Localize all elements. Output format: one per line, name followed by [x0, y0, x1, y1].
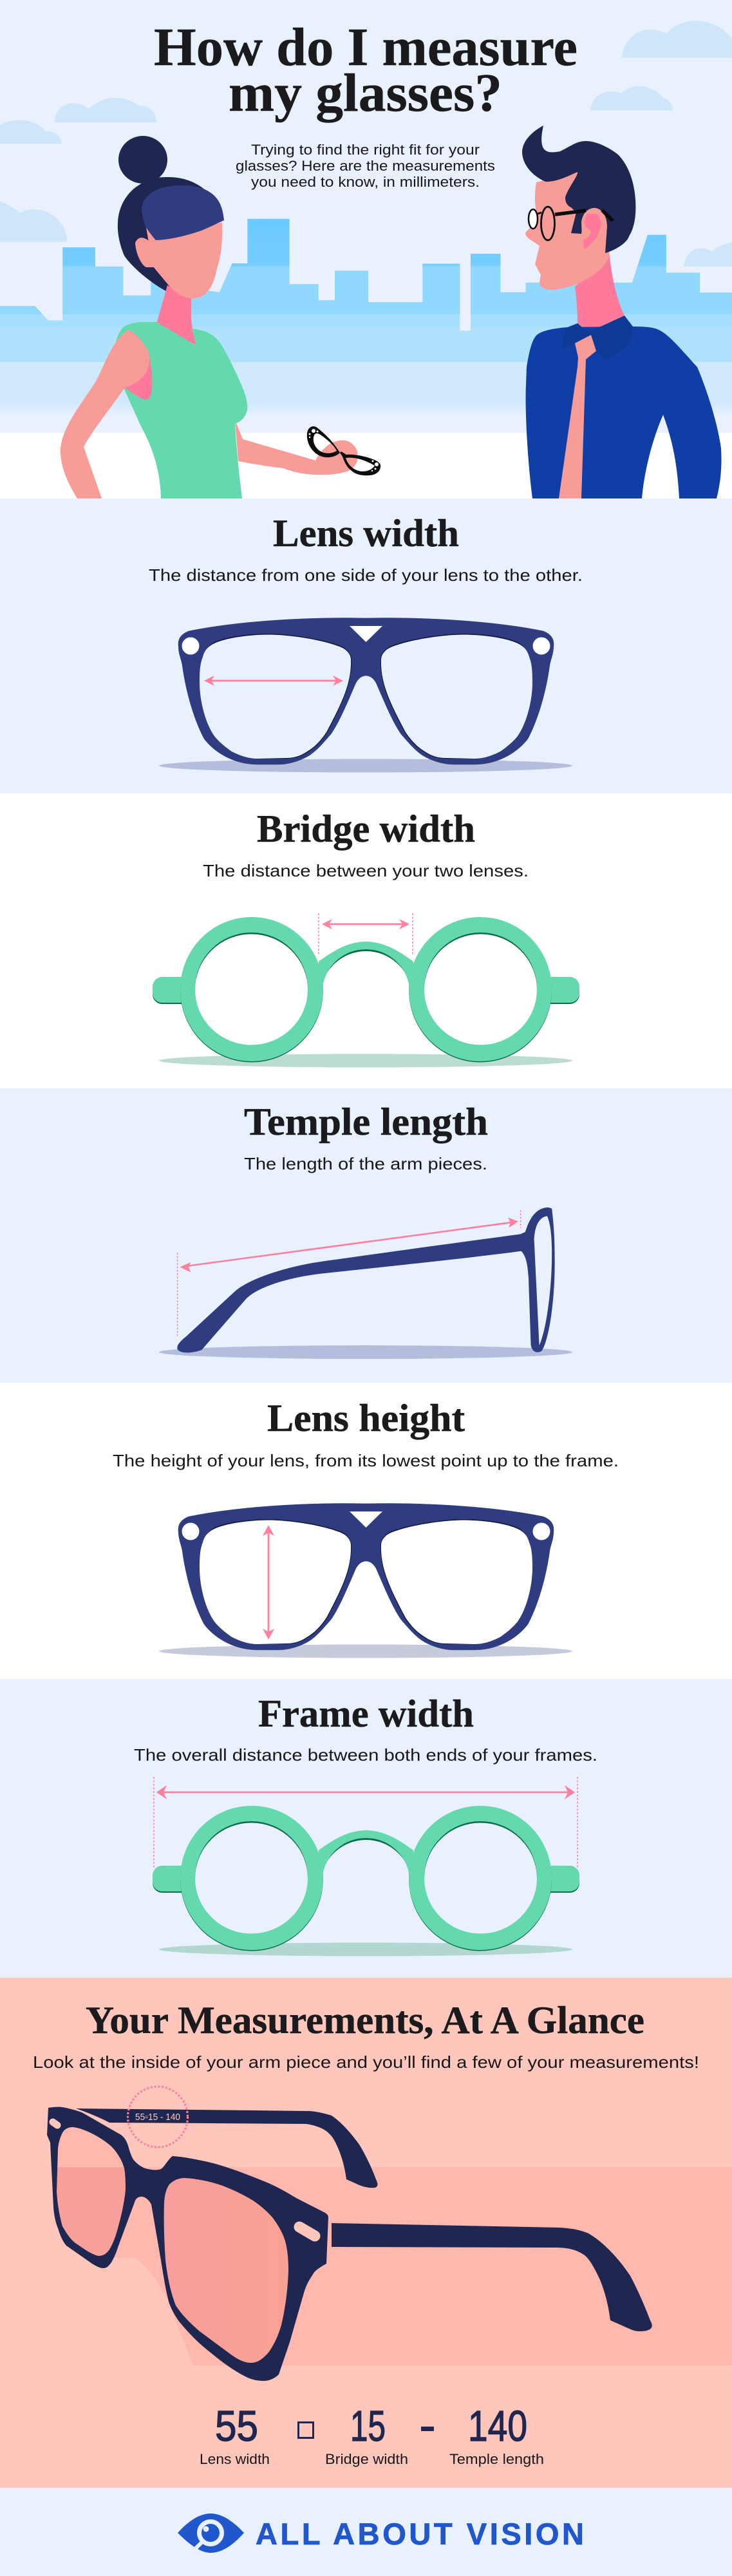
panel: bridge width — [0, 793, 732, 1088]
description: bridge width: The distance between your two lenses. — [203, 861, 529, 880]
skyline — [0, 219, 732, 417]
main title: How do I measure — [154, 17, 577, 77]
icon: man's glasses — [529, 207, 613, 240]
measurement labels: Bridge width — [325, 2451, 408, 2467]
panel: lens width — [0, 498, 732, 793]
heading: bridge width: Bridge width — [257, 808, 475, 850]
arrow: bridge width — [319, 913, 413, 955]
callout: arm piece numbers: 55▫15 - 140 — [135, 2112, 180, 2123]
woman — [61, 136, 357, 498]
heading: lens height: Lens height — [267, 1397, 465, 1439]
callout: arm piece numbers — [127, 2087, 188, 2147]
arrow: lens height — [263, 1525, 274, 1640]
icon: cat eye glasses in hand — [307, 426, 380, 475]
arrow: frame width — [154, 1777, 577, 1868]
logo wordmark: ALL ABOUT VISION — [256, 2517, 584, 2551]
arrow: temple length — [178, 1210, 521, 1336]
description: measurements: Look at the inside of your arm piece and you’ll find a few of your measurements! — [33, 2052, 699, 2072]
description: frame width: The overall distance between both ends of your frames. — [134, 1745, 597, 1765]
heading: frame width: Frame width — [258, 1692, 474, 1735]
intro text — [236, 142, 495, 190]
arrow: lens width — [204, 676, 343, 686]
side view frame with temple arrow — [159, 1208, 572, 1359]
clouds — [0, 21, 732, 267]
main title — [154, 17, 577, 123]
measurement numbers: 55 — [215, 2402, 258, 2450]
intro text: glasses? Here are the measurements — [236, 158, 495, 174]
large navy glasses illustration — [47, 2107, 732, 2381]
measurement labels: Lens width — [200, 2451, 270, 2467]
panel: footer — [0, 2488, 732, 2576]
green round frame with frame width arrow — [153, 1777, 579, 1956]
panel: frame width — [0, 1679, 732, 1978]
measurement numbers — [215, 2402, 527, 2450]
description: temple length: The length of the arm pieces. — [244, 1154, 487, 1173]
navy frame with lens height arrow — [159, 1504, 572, 1658]
dash — [421, 2427, 434, 2431]
measurement numbers: 140 — [468, 2402, 527, 2450]
intro text: you need to know, in millimeters. — [251, 174, 480, 190]
description: lens height: The height of your lens, from its lowest point up to the frame. — [113, 1451, 619, 1470]
icon: eye logo — [178, 2514, 244, 2553]
panel: hero — [0, 0, 732, 498]
man — [522, 126, 722, 498]
intro text: Trying to find the right fit for your — [251, 142, 480, 158]
measurement labels: Temple length — [449, 2451, 544, 2467]
heading: temple length: Temple length — [244, 1101, 488, 1143]
box symbol — [299, 2423, 313, 2438]
panel: temple length — [0, 1088, 732, 1383]
panel: your measurements — [0, 1978, 732, 2488]
green round frame with bridge arrow — [153, 913, 579, 1068]
description: lens width: The distance from one side of your lens to the other. — [149, 565, 583, 585]
panel: lens height — [0, 1383, 732, 1679]
hero backdrop — [0, 21, 732, 417]
main title: my glasses? — [229, 63, 502, 123]
measurement numbers: 15 — [350, 2402, 386, 2450]
heading: lens width: Lens width — [273, 512, 459, 554]
navy frame with lens width arrow — [159, 618, 572, 773]
measurement labels — [200, 2451, 544, 2467]
heading: measurements: Your Measurements, At A Glance — [86, 1999, 644, 2041]
